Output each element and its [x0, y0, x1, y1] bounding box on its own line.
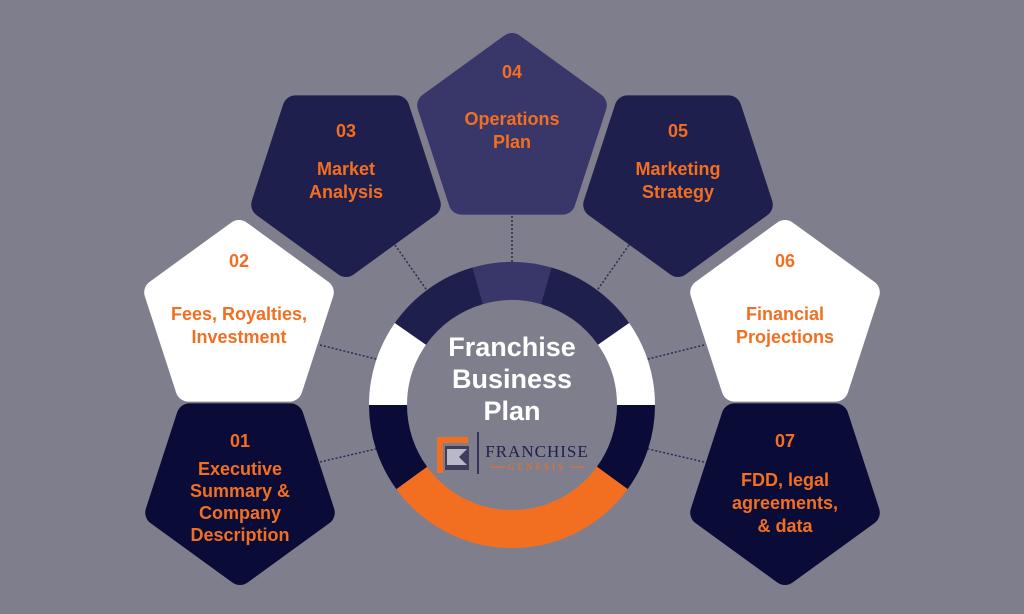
panel 07: 07 [775, 431, 795, 451]
panel 05: Strategy [642, 182, 714, 202]
center title: Franchise [448, 332, 576, 362]
panel 06: Projections [736, 327, 834, 347]
panel 05 [596, 108, 760, 264]
panel 04 [430, 46, 594, 202]
panel 04: Operations [464, 109, 560, 129]
logo [437, 432, 589, 474]
panel 06: 06 [775, 251, 795, 271]
panel 02: 02 [229, 251, 249, 271]
panel 06 [703, 233, 867, 389]
ring [388, 281, 636, 529]
center title: Plan [483, 396, 541, 426]
panel 01: Executive [198, 459, 282, 479]
panel 07: & data [757, 516, 813, 536]
panel 01: Company [199, 503, 281, 523]
connector lines [320, 212, 704, 462]
panel 01 [158, 416, 322, 572]
panel 03: Market [317, 159, 375, 179]
panel 07 [703, 416, 867, 572]
panel 01: Description [190, 525, 290, 545]
panel 06: Financial [746, 304, 824, 324]
panel 03: 03 [336, 121, 356, 141]
panel 02 [157, 233, 321, 389]
panel 05: Marketing [635, 159, 721, 179]
panel 03: Analysis [309, 182, 383, 202]
panel 07: agreements, [732, 493, 838, 513]
logo: GENESIS [508, 462, 566, 472]
panel 01: Summary & [190, 481, 290, 501]
logo: FRANCHISE [485, 442, 589, 461]
panel 01: 01 [230, 431, 250, 451]
panel 05: 05 [668, 121, 688, 141]
panel 02: Investment [191, 327, 287, 347]
center title [448, 332, 576, 426]
panel 02: Fees, Royalties, [171, 304, 307, 324]
panel 04: Plan [493, 132, 531, 152]
panel 07: FDD, legal [741, 470, 829, 490]
panel 04: 04 [502, 62, 522, 82]
center title: Business [452, 364, 572, 394]
panel 03 [264, 108, 428, 264]
